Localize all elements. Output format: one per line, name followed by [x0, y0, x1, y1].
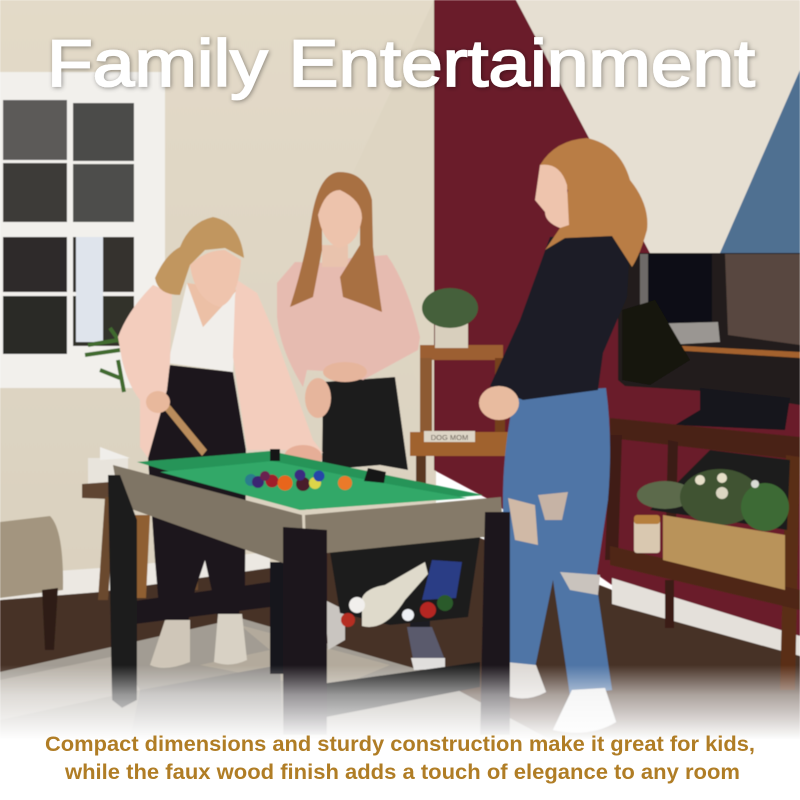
front stretcher: [327, 662, 480, 717]
background walls: [0, 0, 800, 640]
neck: [322, 245, 348, 267]
right apron: [305, 497, 503, 553]
felt surface: [160, 461, 467, 510]
hands: [479, 386, 519, 420]
wall shelf with plant: [410, 288, 508, 486]
back sneaker: [325, 600, 345, 650]
caption line 1: Compact dimensions and sturdy construction make it great for kids,: [45, 732, 755, 756]
storage net: [330, 537, 480, 625]
left apron: [113, 465, 304, 565]
bowling pin: [361, 562, 428, 627]
hands: [305, 378, 331, 418]
middle girl: [277, 172, 445, 670]
wall shelf with plant: DOG MOM: [431, 433, 468, 442]
caption: [45, 732, 755, 784]
left leg: [108, 475, 137, 708]
pool table: [108, 449, 510, 735]
window: [0, 72, 165, 388]
hands and cue: [163, 405, 207, 456]
back leg: [270, 562, 284, 674]
title: Family Entertainment: [47, 26, 755, 100]
left stretcher: [127, 582, 270, 625]
ankle: [410, 608, 430, 628]
hair: [290, 172, 382, 312]
floor and baseboards: [0, 520, 800, 800]
front leg: [283, 527, 327, 735]
corner pockets: [270, 449, 280, 461]
felt rails: [137, 451, 483, 510]
sneaker: [407, 627, 445, 670]
left girl: [118, 217, 323, 668]
side table and stool: [0, 447, 198, 650]
rug: [0, 618, 560, 800]
toy balls: [341, 595, 453, 627]
pink top: [277, 255, 420, 387]
face: [318, 190, 362, 248]
sneakers: [150, 620, 190, 668]
black pants: [322, 377, 408, 470]
sneakers: [506, 662, 546, 698]
face: [190, 250, 241, 307]
bottom white band: [0, 739, 800, 800]
TV console: [605, 418, 800, 690]
black sweater: [490, 235, 629, 400]
house plant behind left girl: [85, 328, 124, 392]
jeans: [503, 388, 612, 695]
bottom white fade: [0, 665, 800, 740]
white shirt: [168, 283, 237, 372]
pink cardigan: [118, 285, 172, 458]
blue bag: [422, 560, 462, 600]
hair: [155, 217, 244, 295]
television: [618, 253, 800, 430]
right girl: [479, 138, 647, 733]
billiard balls: [245, 470, 352, 491]
face: [535, 165, 569, 228]
black pants: [148, 365, 246, 622]
caption line 2: while the faux wood finish adds a touch of elegance to any room: [64, 760, 740, 784]
planter with flowers and candle: [634, 450, 790, 590]
hair: [540, 138, 647, 267]
skin at neckline: [187, 283, 237, 327]
right leg: [480, 512, 510, 735]
